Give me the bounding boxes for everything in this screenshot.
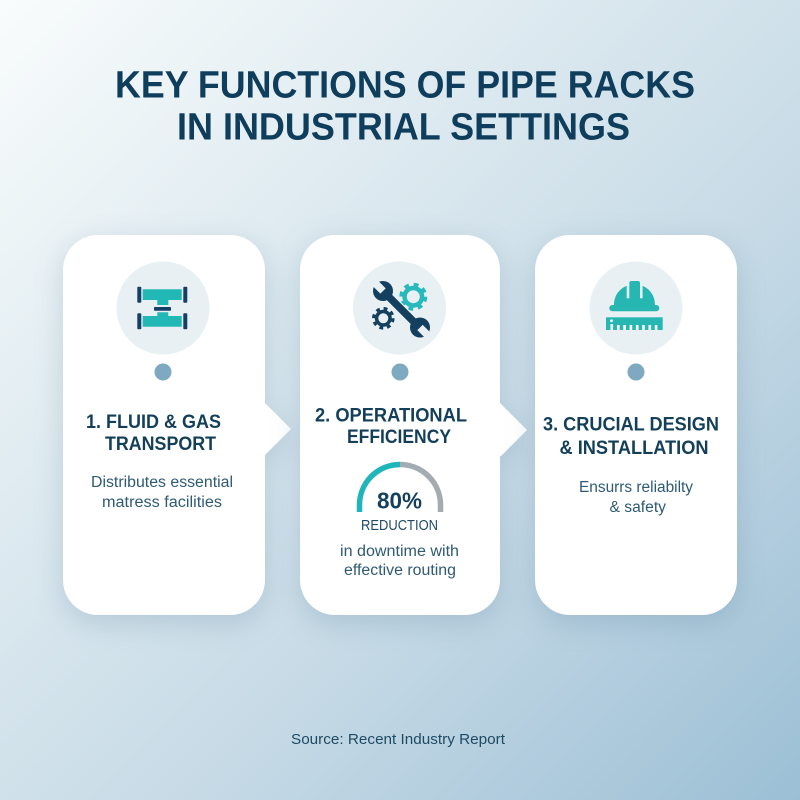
step marker 1 — [154, 364, 172, 380]
heading: operational efficiency: EFFICIENCY — [347, 426, 451, 448]
heading: crucial design and installation: 3. CRUCIAL DESIGN — [543, 414, 719, 436]
description 3: Ensurrs reliabilty — [579, 479, 693, 496]
description 1: Distributes essential — [91, 474, 233, 491]
heading: operational efficiency — [315, 404, 467, 448]
icon: hard hat and ruler — [590, 262, 682, 354]
gauge: 80% reduction: 80% — [377, 488, 422, 514]
gauge: 80% reduction: REDUCTION — [361, 518, 438, 534]
panel: crucial design and installation — [535, 235, 737, 615]
card with arrow: panel 2 — [300, 235, 527, 615]
description 2 — [340, 543, 459, 579]
icon: pipes — [116, 262, 210, 354]
title — [115, 64, 695, 148]
description 2: in downtime with — [340, 543, 459, 560]
title: KEY FUNCTIONS OF PIPE RACKS — [115, 64, 695, 106]
heading: fluid and gas transport — [86, 411, 221, 455]
source note: Source: Recent Industry Report — [291, 731, 506, 748]
step marker 2 — [392, 364, 408, 380]
description 1 — [91, 474, 233, 511]
description 3 — [579, 479, 693, 516]
panel: fluid and gas transport — [63, 235, 291, 615]
icon: wrench and gears — [353, 262, 446, 354]
step marker 3 — [628, 364, 644, 380]
heading: fluid and gas transport: 1. FLUID & GAS — [86, 411, 221, 433]
heading: operational efficiency: 2. OPERATIONAL — [315, 404, 467, 426]
description 1: matress facilities — [102, 494, 222, 511]
title: IN INDUSTRIAL SETTINGS — [177, 106, 630, 148]
gauge: 80% reduction — [360, 464, 440, 534]
heading: crucial design and installation: & INSTALLATION — [560, 437, 708, 459]
heading: fluid and gas transport: TRANSPORT — [105, 433, 216, 455]
heading: crucial design and installation — [543, 414, 719, 459]
description 3: & safety — [610, 499, 666, 516]
card with arrow: panel 1 — [63, 235, 291, 615]
description 2: effective routing — [344, 562, 456, 579]
card: panel 3 — [535, 235, 737, 615]
panel: operational efficiency — [300, 235, 527, 615]
